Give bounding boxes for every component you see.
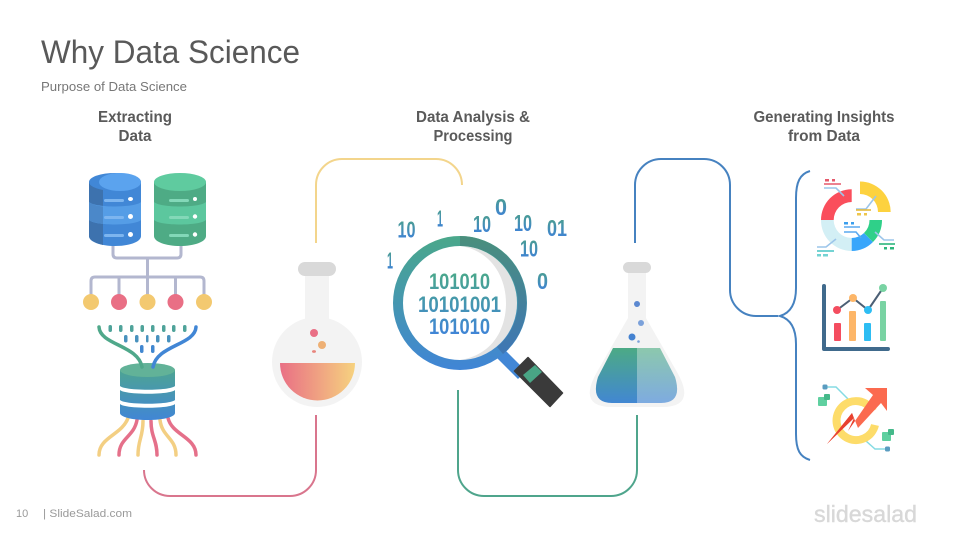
arrow: blue connector xyxy=(635,159,778,316)
floating binary digits: 10 xyxy=(514,210,532,236)
brace xyxy=(780,171,810,460)
axes xyxy=(824,286,888,349)
handle band xyxy=(523,365,542,383)
bars xyxy=(834,301,886,341)
footer source: | SlideSalad.com xyxy=(43,508,132,520)
liquid left xyxy=(596,348,637,403)
heading: generating insights: Generating Insights xyxy=(754,109,895,126)
binary in lens: 101010 xyxy=(429,314,490,339)
floating binary digits: 1 xyxy=(437,206,443,232)
icon: funnel into database xyxy=(99,325,196,455)
heading: extracting data xyxy=(98,109,172,145)
blue database xyxy=(89,173,141,246)
connector tree xyxy=(91,245,204,296)
red segment xyxy=(821,189,852,220)
output wires xyxy=(99,418,196,455)
icon: growth arrow and target xyxy=(818,384,894,452)
heading: data analysis and processing: Processing xyxy=(434,128,512,145)
arrow: yellow connector xyxy=(316,159,462,243)
heading: data analysis and processing: Data Analysis & xyxy=(416,109,530,126)
subtitle: Purpose of Data Science xyxy=(41,80,187,94)
icon: database group xyxy=(83,173,212,310)
heading: extracting data: Data xyxy=(118,128,152,145)
bubbles xyxy=(628,301,644,343)
flask cap xyxy=(623,262,651,273)
heading: extracting data: Extracting xyxy=(98,109,172,126)
binary in lens: 10101001 xyxy=(418,292,501,317)
circuit lines xyxy=(825,387,887,449)
small database xyxy=(120,363,175,420)
pale segment xyxy=(821,220,852,251)
floating binary digits: 10 xyxy=(473,211,491,237)
arrow: pink connector xyxy=(144,415,316,496)
handle xyxy=(514,358,562,406)
binary in lens: 101010 xyxy=(429,269,490,294)
trend line xyxy=(833,284,887,314)
lens ring xyxy=(398,241,522,365)
floating binary digits: 0 xyxy=(495,194,507,220)
heading: data analysis and processing xyxy=(416,109,530,145)
green segment xyxy=(864,220,882,242)
lens ring shade xyxy=(460,236,527,354)
floating binary digits xyxy=(387,194,567,294)
blue segment xyxy=(852,233,873,251)
funnel curves xyxy=(99,327,196,367)
flask liquid xyxy=(280,363,355,400)
icon: conical flask xyxy=(590,262,684,407)
icon: magnifying glass xyxy=(387,194,567,406)
footer page number: 10 xyxy=(16,508,28,520)
liquid right xyxy=(637,348,677,403)
arrow: green connector xyxy=(458,390,637,496)
title: Why Data Science xyxy=(41,34,300,70)
flask cap xyxy=(298,262,336,276)
green database xyxy=(154,173,206,246)
bubbles xyxy=(310,329,326,353)
floating binary digits: 1 xyxy=(387,248,393,274)
logo wordmark: slidesalad xyxy=(814,501,917,527)
icon: round flask xyxy=(272,262,362,407)
lens shadow xyxy=(460,246,517,360)
green cubes xyxy=(818,394,894,441)
handle stem xyxy=(497,350,526,379)
arrow xyxy=(827,388,887,444)
labels xyxy=(817,184,895,251)
binary in lens xyxy=(418,269,501,339)
lens xyxy=(403,246,517,360)
icon: donut chart xyxy=(817,179,895,256)
yellow segment xyxy=(860,182,891,212)
node dots xyxy=(83,294,212,310)
heading: generating insights: from Data xyxy=(788,128,860,145)
floating binary digits: 0 xyxy=(537,268,548,294)
heading: generating insights xyxy=(754,109,895,145)
floating binary digits: 01 xyxy=(547,215,567,241)
icon: bar and line chart xyxy=(824,284,888,349)
floating binary digits: 10 xyxy=(520,236,538,262)
data dots xyxy=(108,325,186,353)
yellow ring xyxy=(837,401,875,440)
floating binary digits: 10 xyxy=(398,216,416,242)
